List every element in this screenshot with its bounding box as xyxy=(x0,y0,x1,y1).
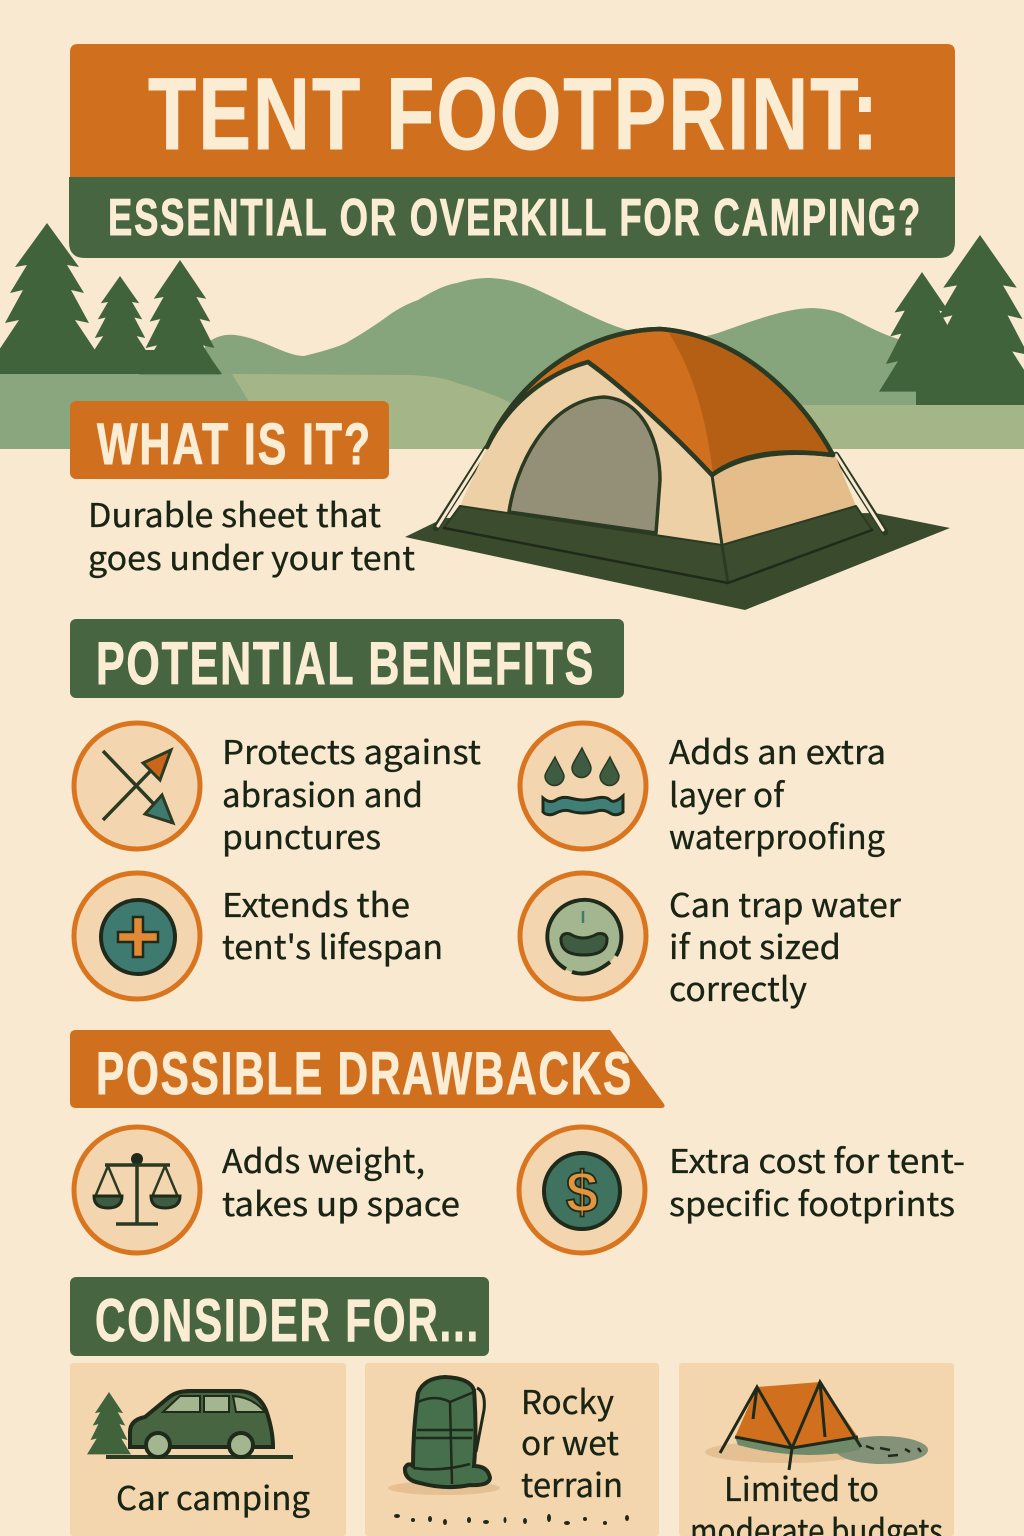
door xyxy=(509,397,660,533)
heading: possible drawbacks xyxy=(70,1030,665,1108)
icon: backpack xyxy=(388,1377,500,1495)
icon: balance scale xyxy=(74,1127,200,1253)
benefit: waterproofing: layer of xyxy=(669,769,785,817)
benefit: waterproofing xyxy=(520,723,886,859)
card: limited budgets xyxy=(679,1363,954,1536)
text: what is it description: Durable sheet that xyxy=(88,489,381,537)
benefit: abrasion: Protects against xyxy=(222,726,481,774)
icon: car and tree xyxy=(87,1391,293,1459)
text: what is it description xyxy=(88,489,415,580)
drawback: weight: Adds weight, xyxy=(222,1135,425,1183)
drawback: cost: Extra cost for tent- xyxy=(669,1135,965,1183)
icon: small tent and puddle xyxy=(705,1382,928,1470)
benefit: waterproofing: waterproofing xyxy=(669,811,885,859)
roof xyxy=(487,329,833,475)
icon: water pooling gauge xyxy=(520,873,646,999)
trees: right group xyxy=(879,235,1024,405)
heading: consider for xyxy=(70,1277,489,1356)
card: limited budgets: Limited to xyxy=(724,1463,879,1511)
title banner xyxy=(70,44,955,178)
icon: crossed arrows xyxy=(74,723,200,849)
heading: potential benefits xyxy=(70,619,624,698)
benefit: abrasion: abrasion and xyxy=(222,769,423,817)
heading: consider for: CONSIDER FOR... xyxy=(95,1287,480,1354)
icon: plus in circle xyxy=(74,873,200,999)
heading: possible drawbacks: POSSIBLE DRAWBACKS xyxy=(96,1040,633,1107)
illustration: tent on footprint xyxy=(405,329,950,610)
icon: dollar coin: $ xyxy=(566,1160,598,1225)
card: rocky or wet terrain: terrain xyxy=(521,1459,623,1507)
subtitle banner xyxy=(69,177,955,258)
benefit: waterproofing: Adds an extra xyxy=(669,726,886,774)
card: car camping xyxy=(70,1363,346,1536)
roof shaded side xyxy=(669,333,831,473)
icon: dollar coin xyxy=(519,1127,645,1253)
rock dots xyxy=(394,1514,629,1525)
footprint sheet xyxy=(405,513,950,610)
groundsheet band xyxy=(444,506,872,583)
drawback: weight xyxy=(74,1127,460,1253)
front panel xyxy=(460,364,722,545)
card: car camping: Car camping xyxy=(116,1472,310,1520)
card: rocky or wet terrain xyxy=(365,1363,659,1536)
drawback: trapped water: Can trap water xyxy=(669,879,901,927)
drawback: cost xyxy=(519,1127,965,1253)
drawback: trapped water: correctly xyxy=(669,963,807,1011)
tent body xyxy=(460,362,856,545)
benefit: abrasion xyxy=(74,723,481,859)
benefit: lifespan xyxy=(74,873,443,999)
heading: what is it xyxy=(70,401,389,479)
drawback: cost: specific footprints xyxy=(669,1178,955,1226)
tent poles xyxy=(436,448,885,532)
drawback: trapped water xyxy=(520,873,901,1011)
drawback: weight: takes up space xyxy=(222,1178,460,1226)
trees: left group xyxy=(0,223,222,374)
card: rocky or wet terrain: Rocky xyxy=(521,1376,614,1424)
text: what is it description: goes under your tent xyxy=(88,532,415,580)
drawback: trapped water: if not sized xyxy=(669,921,841,969)
heading: what is it: WHAT IS IT? xyxy=(97,412,372,477)
benefit: lifespan: tent's lifespan xyxy=(222,921,443,969)
landscape: hills and trees xyxy=(0,223,1024,449)
heading: potential benefits: POTENTIAL BENEFITS xyxy=(96,630,595,697)
card: rocky or wet terrain: or wet xyxy=(521,1417,619,1465)
icon: water drops and waves xyxy=(520,723,646,849)
benefit: lifespan: Extends the xyxy=(222,879,410,927)
benefit: abrasion: punctures xyxy=(222,811,381,859)
